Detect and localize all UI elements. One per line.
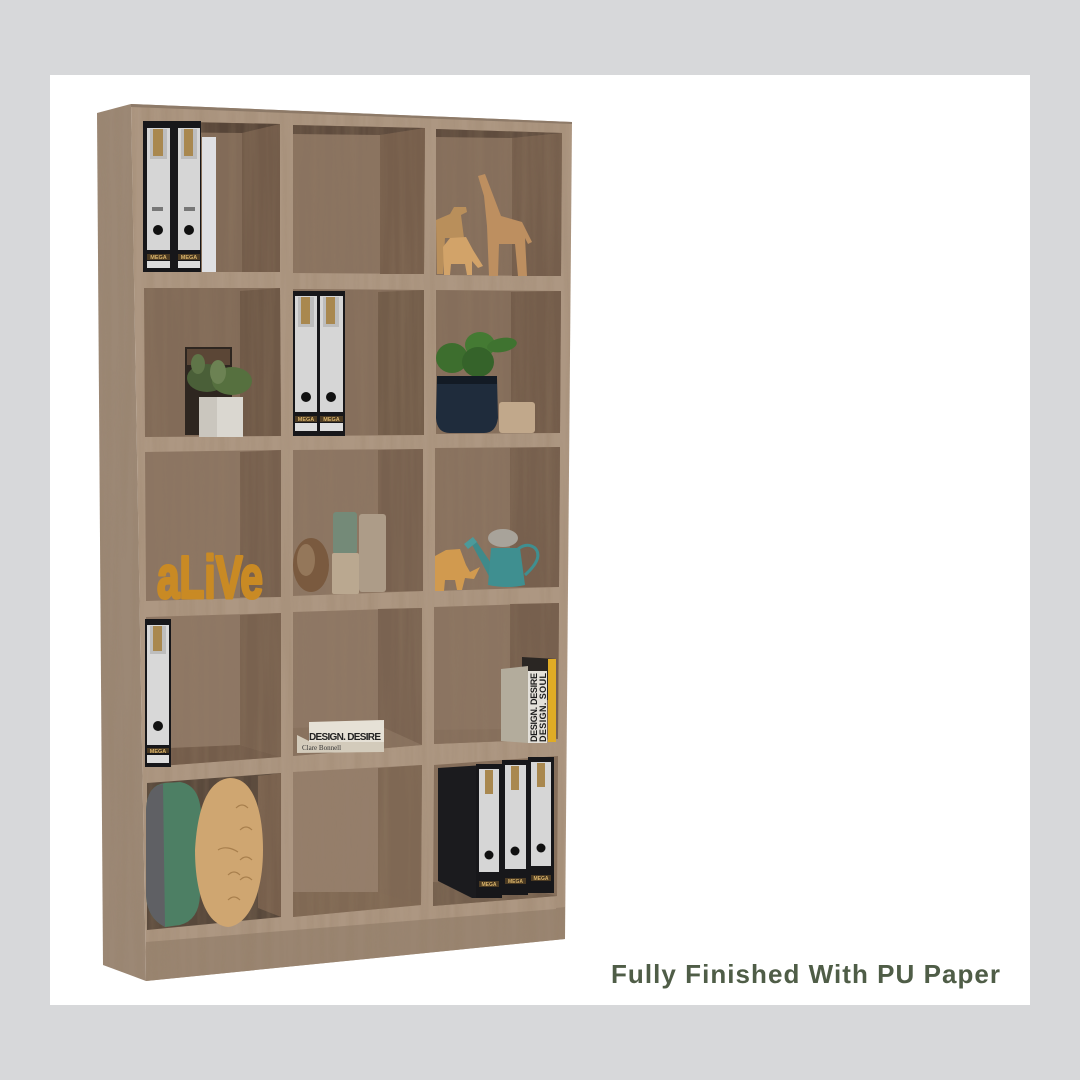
caption: fully finished with pu paper: Fully Finished With PU Paper [611, 959, 1000, 989]
green cushion [146, 782, 201, 927]
binders second row [293, 291, 345, 436]
binders second row: MEGA [323, 417, 340, 423]
single binder fourth row: MEGA [150, 749, 166, 755]
front frame [131, 104, 572, 981]
bookcase [97, 104, 572, 981]
plinth [146, 907, 565, 981]
binders bottom right [438, 757, 554, 898]
upright design books: DESIGN. DESIRE [529, 673, 539, 742]
stacked design books: Clare Bonnell [302, 744, 341, 752]
row 4 cells [146, 603, 559, 767]
row 1 cells [143, 121, 562, 276]
white product panel [50, 75, 1030, 1005]
binders bottom right: MEGA [508, 879, 523, 885]
stacked design books: DESIGN. DESIRE [309, 732, 381, 743]
plant in white pot [185, 347, 252, 437]
row 3 cells [145, 447, 560, 601]
vase and candles [293, 512, 386, 594]
row 5 cells [147, 756, 558, 930]
plant in navy pot with small cup [436, 332, 535, 433]
row 2 cells [144, 288, 561, 437]
left side panel [97, 104, 146, 981]
upright design books: DESIGN. SOUL [538, 672, 548, 742]
binders bottom right: MEGA [482, 882, 497, 888]
binders top left [143, 121, 216, 272]
alive wooden letters: aLiVe [157, 544, 263, 611]
wooden camels and giraffe [436, 174, 532, 276]
upright design books [501, 657, 556, 743]
binders second row: MEGA [298, 417, 314, 423]
single binder fourth row [145, 619, 171, 767]
binders top left: MEGA [150, 255, 167, 261]
gold cushion [195, 778, 263, 927]
teal watering can [464, 529, 538, 587]
wood grain texture [97, 104, 572, 981]
product infographic canvas [50, 75, 1030, 1005]
top edge [131, 104, 572, 124]
binders top left: MEGA [181, 255, 197, 261]
stacked design books [297, 720, 384, 753]
binders bottom right: MEGA [534, 876, 549, 882]
wooden elephant [435, 549, 480, 591]
